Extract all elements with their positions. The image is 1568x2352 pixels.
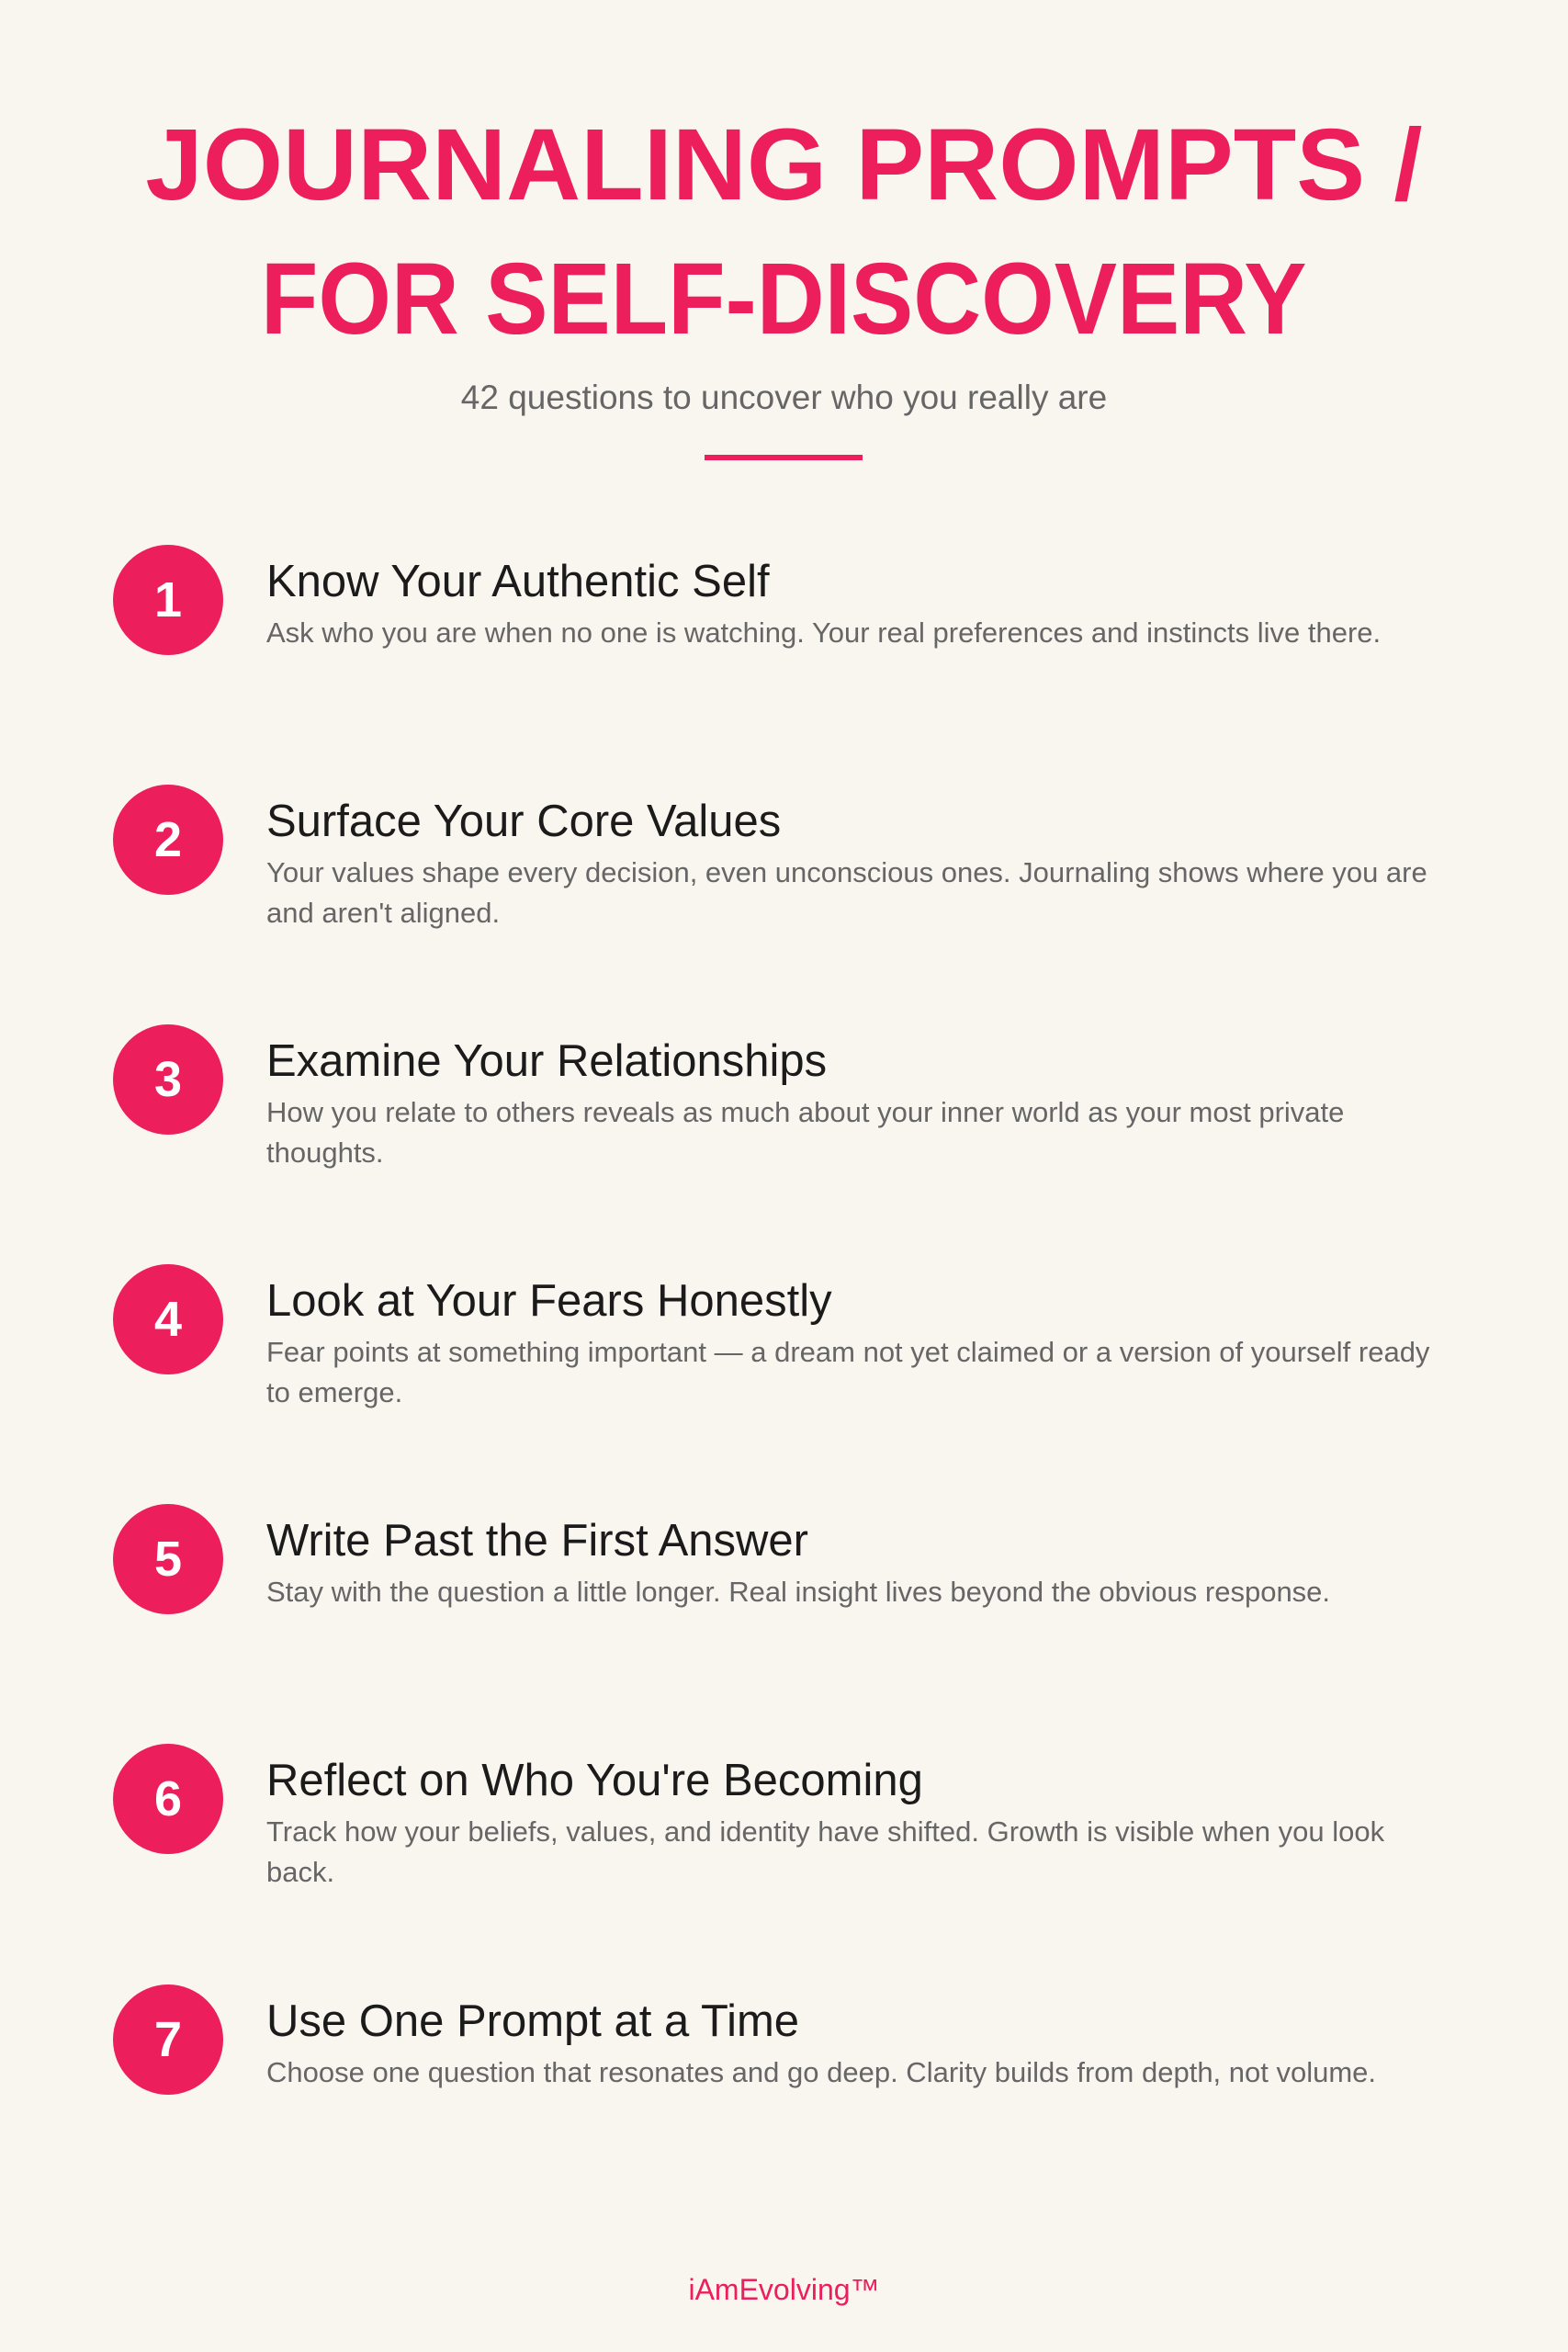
title: JOURNALING PROMPTS / [145,108,1423,221]
item 4: 4 [154,1292,182,1347]
title [145,108,1423,356]
item 2: Your values shape every decision, even unconscious ones. Journaling shows where you are [266,856,1427,888]
item 7: Choose one question that resonates and go deep. Clarity builds from depth, not volume. [266,2056,1376,2088]
item 3 [113,1024,1344,1169]
text: to emerge. [266,1376,402,1408]
item 6: 6 [154,1771,182,1826]
item 7: Use One Prompt at a Time [266,1996,799,2046]
item 7 [113,1984,1376,2095]
text: thoughts. [266,1136,384,1169]
item 2: Surface Your Core Values [266,797,781,846]
item 3: 3 [154,1052,182,1107]
item 1 [113,545,1381,655]
item 1: Know Your Authentic Self [266,557,770,606]
title: FOR SELF-DISCOVERY [261,243,1307,356]
item 4: Look at Your Fears Honestly [266,1276,832,1326]
item 5: Write Past the First Answer [266,1516,808,1566]
footer brand: iAmEvolving™ [688,2273,880,2306]
text: and aren't aligned. [266,897,500,929]
accent line [705,455,863,460]
item 4 [113,1264,1429,1408]
item 6 [113,1744,1385,1888]
text: back. [266,1856,334,1888]
item 3: How you relate to others reveals as much about your inner world as your most private [266,1096,1344,1128]
subtitle: 42 questions to uncover who you really are [461,379,1107,416]
item 5: 5 [154,1532,182,1587]
item 6: Reflect on Who You're Becoming [266,1756,923,1805]
item 7: 7 [154,2012,182,2067]
item 5 [113,1504,1330,1614]
item 2: 2 [154,812,182,867]
item 1: Ask who you are when no one is watching. Your real preferences and instincts live there. [266,616,1381,649]
item 5: Stay with the question a little longer. Real insight lives beyond the obvious response. [266,1576,1330,1608]
item 4: Fear points at something important — a dream not yet claimed or a version of yourself ready [266,1336,1429,1368]
item 2 [113,785,1427,929]
item 1: 1 [154,572,182,628]
item 3: Examine Your Relationships [266,1036,827,1086]
item 6: Track how your beliefs, values, and identity have shifted. Growth is visible when you look [266,1815,1384,1848]
